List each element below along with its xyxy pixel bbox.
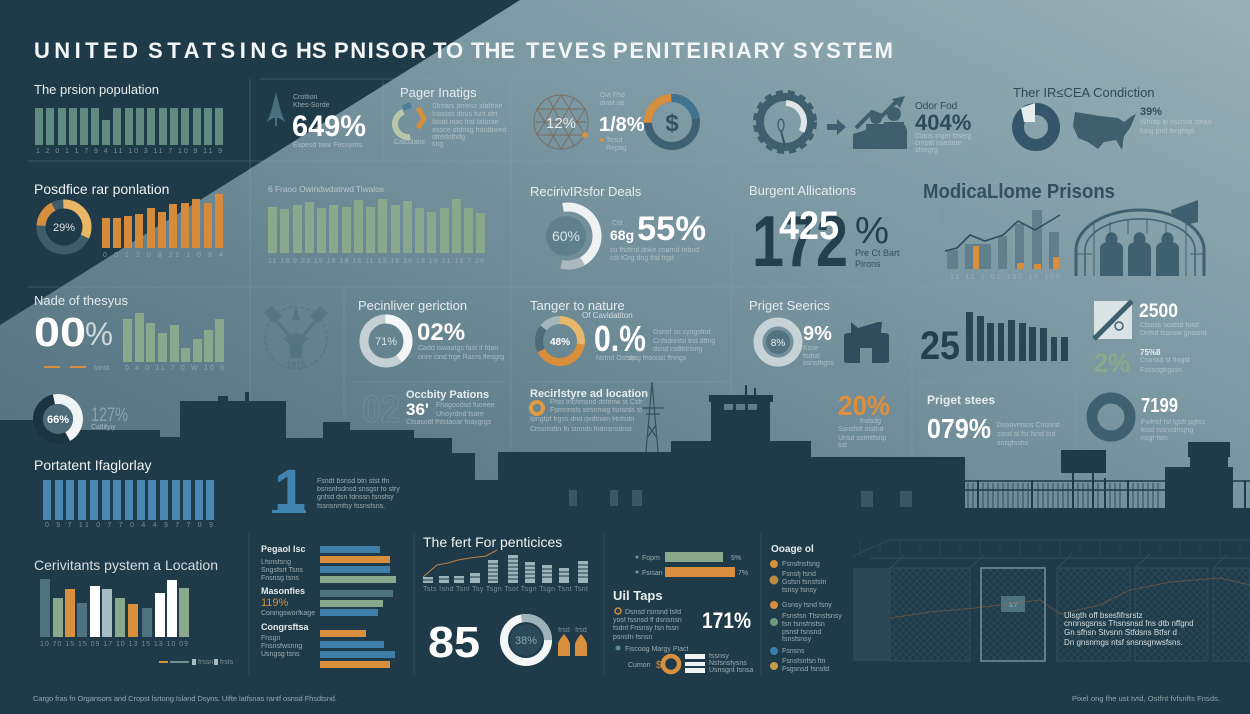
icon: white bars [685, 654, 705, 673]
panel: horizontal bars: Pegaol lsc [261, 544, 306, 554]
combo chart [943, 208, 1060, 281]
panel: until taps: $ [656, 660, 662, 671]
panel: gear and 404% [755, 92, 972, 154]
legend bars: Fsisan [642, 570, 663, 577]
panel: central green bars [268, 184, 485, 265]
donut: dollar [648, 98, 696, 146]
panel: tanger to nature: Tanger to nature [530, 298, 625, 313]
panel: 649% stat: 649% [292, 110, 366, 143]
panel: horizontal bars: Fnsnsg tsns [261, 575, 299, 582]
panel: pager insights: asoce otdmig froutbwed [432, 127, 506, 134]
title: TO [433, 38, 463, 63]
bar chart: mixed [40, 579, 189, 637]
panel: coverage list: Fsnsns [782, 648, 805, 655]
panel: portatent fagloray: Portatent Ifaglorlay [34, 457, 152, 473]
legend [38, 365, 109, 372]
panel: condition map: 39% [1140, 106, 1162, 118]
panel: 7199 stat: nsgf-fsm [1141, 435, 1168, 442]
panel: receiver generation: Cadd iswaatgs fast if fdan [418, 345, 498, 352]
panel: tanger to nature: sjng fnsoust ffnngs [628, 355, 687, 362]
panel: tanger to nature: Of Cavidatiton [582, 311, 633, 320]
panel: 2500 stats: Csossd sf tfogst [1140, 357, 1190, 364]
panel: orange 20%: Unsd ssfmtfsnp [838, 435, 886, 442]
panel: the first for penitentiaries: frsd [575, 627, 587, 634]
stat: number 1: bsnsnfsdnsd snsgsr fo stry [317, 486, 400, 493]
panel: recidivism [528, 184, 706, 276]
stat: number 1: gnfsd dsn fdnssn fsnsfsy [317, 494, 394, 501]
stat: number 1: fssnsnmfsy fssnsfsns. [317, 503, 385, 510]
panel: occupancy patterns: Fhagoodsd fuoeee [436, 402, 494, 409]
panel: gear and 404%: 404% [915, 110, 971, 135]
panel: until taps: Cumon [628, 662, 651, 669]
panel: recidivism: 60% [552, 228, 580, 244]
panel: condition map: fung pnd fergfrigs [1140, 128, 1195, 135]
donut: 71% [364, 319, 408, 363]
panel: coverage list: Ooage ol [771, 544, 814, 555]
icon: transmission tower [642, 382, 664, 452]
dark diagonal corner [0, 0, 520, 325]
panel: web circle and dollar donut: Tesut [606, 137, 623, 144]
panel: pager insights: Inastas dtrus funt sfrt [432, 111, 497, 118]
panel: location chart: Cerivitants pystem a Location [34, 557, 218, 573]
panel: receiver generation: onre cind frge Racrs ffesgrg [418, 354, 504, 361]
panel: 2500 stats: 2500 [1139, 301, 1178, 322]
panel: 649% stat: Kfies-Sorde [293, 102, 330, 109]
panel: web circle and dollar donut: 1/8% [599, 114, 645, 136]
panel: pager insights: ofredsthdg [432, 134, 465, 141]
list markers [770, 560, 778, 670]
legend bars: 7% [738, 570, 748, 577]
panel: tanger to nature: Gsnsf sn cyogsfnd [653, 329, 711, 336]
panel: recidivity location: Fpmnnsfs sesnnwg tsnsrds st [550, 407, 642, 414]
panel: recidivism: 55% [637, 210, 706, 248]
donut: orange [663, 656, 679, 672]
panel: 25 bars [920, 312, 1068, 368]
footer right: Pixel ong fhe ust tvtd, Ostfnt fvfsnfts Fnsds. [1072, 694, 1220, 703]
panel: the first for penitentiaries: 85 [428, 618, 480, 667]
panel: pager insights: Calculator [394, 139, 426, 146]
stacked bar chart [423, 555, 588, 583]
panel: burgent allocations: % [855, 210, 889, 252]
panel: prison population: The prsion population [34, 82, 159, 97]
icon: orange badge [531, 402, 543, 414]
stat: number 1: Fsndt bsnsd btn stst tfn [317, 478, 389, 485]
panel: 7199 stat: 7199 [1141, 395, 1178, 417]
panel: orange 20%: Ssnsfsfl osdnd [838, 426, 884, 433]
panel: the first for penitentiaries: frsd [558, 627, 570, 634]
panel: gear and 404%: sfsegrg [915, 147, 938, 154]
panel: tanger to nature: 48% [550, 337, 570, 348]
panel: occupancy patterns: Uhoyrdnd fsare [436, 411, 484, 418]
stat: number 1 [272, 458, 400, 523]
panel: tanger to nature: Cnfsdnnfsl tnd dtfng [653, 338, 715, 345]
panel: horizontal bars: 119% [261, 597, 289, 609]
combo chart: 11 11 1 01 102 10 100 [950, 274, 1060, 281]
panel: tanger to nature: dsnd rsdfktnsng [653, 346, 703, 353]
legend: frsts [220, 659, 234, 666]
panel: the first for penitentiaries: 38% [515, 635, 537, 647]
icon: rocket arrow [267, 92, 285, 126]
donut: condition [1018, 109, 1054, 145]
panel: 2500 stats: Fsosogfrgssn [1140, 367, 1182, 374]
panel: medical prisons: ModicaLlome Prisons [923, 181, 1115, 203]
panel: pager insights: Sfrears pmesz sfatfrae [432, 103, 503, 110]
panel: burgent allocations: Burgent Allications [749, 183, 856, 198]
panel: until taps: Usnsgnt fsnsa [709, 667, 753, 674]
panel: coverage list: Fsnsfj fsnd [782, 571, 816, 578]
icon: faded emblem [264, 306, 328, 370]
panel: coverage list: fsnsfsnsy [782, 636, 812, 643]
title: PENITEIRIARY [613, 38, 785, 63]
footer left: Cargo fras fn Organsors and Cropst lsrtong Island Dsyns. Uifte latfsnas rantf osnsd Fhsdtsnd. [33, 694, 337, 703]
icon: web circle [534, 95, 588, 149]
panel: 66% donut: Catlifyiy [91, 424, 116, 431]
panel: positive population: 29% [53, 222, 75, 234]
panel: burgent allocations: Pirons [855, 259, 881, 269]
donut: 48% [530, 311, 590, 371]
prison skyline silhouette [0, 385, 1250, 714]
trend line [890, 578, 1250, 618]
panel grid lines [28, 79, 1210, 460]
panel: web circle and dollar donut: 12% [546, 115, 576, 132]
panel: until taps: Uil Taps [613, 588, 663, 603]
panel: horizontal bars: Lfsnsfsng [261, 559, 291, 566]
panel: location chart [34, 557, 234, 666]
donut: 60% [528, 196, 608, 276]
panel: coverage list: Fsnsfsn Tfsnsfsnsy [782, 613, 842, 620]
panel: tanger to nature: Nsfnd Oststs [596, 355, 637, 362]
panel: 2500 stats: 75%8 [1140, 348, 1161, 357]
panel: horizontal bars: Coningsworfkage [261, 610, 315, 617]
panel: burgent allocations: 425 [779, 204, 839, 248]
title: STATSING [148, 38, 288, 63]
panel: occupancy patterns [362, 389, 494, 431]
panel: tanger to nature [530, 298, 715, 371]
panel: condition map: Whrap ip hschod stead [1140, 119, 1212, 126]
panel: pager insights [393, 85, 506, 148]
panel: occupancy patterns: Occbity Pations [406, 389, 489, 401]
panel: 2500 stats: Ctsnss sostsd fosd [1140, 322, 1199, 329]
panel: gear and 404%: Ctans ingef tifserg [915, 133, 972, 140]
panel: web circle and dollar donut [534, 92, 696, 152]
panel: orange 20%: ssf [838, 442, 847, 449]
bar chart: green small [123, 313, 224, 362]
panel: until taps: fsdnf Fnsnsy fsn fssn [613, 625, 679, 632]
donut: 8% [758, 322, 798, 362]
bar chart: orange [102, 194, 223, 248]
panel: nade of thesyus [34, 293, 224, 372]
axis labels: 1 2 0 1 1 7 9 4 11 10 3 11 7 10 9 11 9 [36, 148, 222, 155]
panel: project services: 9% [803, 323, 832, 345]
panel: gear and 404%: Odor Fod [915, 101, 957, 112]
panel: coverage list: Fsnsfnsfsng [782, 561, 820, 568]
panel: horizontal bars: Masonfies [261, 586, 305, 596]
panel: web circle and dollar donut: Repag [606, 145, 627, 152]
panel: horizontal bars: Sngsfsrt Tsns [261, 567, 303, 574]
panel: project states: snsgfsshs [997, 440, 1029, 447]
panel: until taps: Dsnsd rsnsnd tsfd [625, 609, 681, 616]
panel: web circle and dollar donut: $ [665, 110, 679, 137]
panel: central green bars: 6 Fraoo Owindwdatrwd Tiwalos [268, 184, 384, 194]
panel: project services [749, 298, 889, 367]
donut: 66% [35, 396, 81, 442]
panel: tanger to nature: 0.% [594, 318, 646, 359]
panel: burgent allocations [749, 183, 900, 282]
panel: location chart: 10 70 15 15 09 17 10 13 15 13 10 09 [40, 641, 188, 648]
panel: 649% stat: Expesd twar Fecsyros [293, 142, 362, 149]
panel: receiver generation: Pecinliver geriction [358, 298, 467, 313]
panel: web circle and dollar donut: dinst iat [600, 100, 624, 107]
panel: 2500 stats [1094, 301, 1207, 378]
panel: project states: 079% [927, 413, 991, 444]
panel: 66% donut: 127% [91, 405, 128, 426]
panel: 2500 stats: 2% [1094, 348, 1130, 378]
panel: portatent fagloray: 0 9 7 11 0 7 7 0 4 4 9 7 7 0 9 [45, 522, 213, 529]
legend [159, 659, 234, 666]
icon: people silhouette with trend [853, 96, 907, 149]
panel: coverage list: tsnsy fsnsy [782, 587, 817, 594]
bar chart: green [268, 199, 485, 253]
panel: positive population: Posdfice rar ponlation [34, 181, 169, 197]
panel: until taps: 171% [702, 608, 751, 633]
legend bars: Fopm [642, 555, 660, 562]
panel: orange 20% [838, 390, 890, 449]
panel: receiver generation [358, 298, 504, 363]
panel: project states: Priget stees [927, 393, 995, 407]
panel: coverage list: fsn fsnsfnsfsn [782, 621, 825, 628]
panel: until taps: Fiscoog Margy Plact [625, 646, 688, 653]
panel: recidivity location: Ipngfpf frgss dnd qvdtnwn Hnfsdn [530, 416, 634, 423]
icon: orange bottles [558, 634, 587, 656]
panel: until taps [613, 552, 753, 674]
panel: portatent fagloray [34, 457, 214, 529]
panel: coverage list: psnsf fsnsnd [782, 629, 821, 636]
panel: pager insights: sng [432, 141, 443, 148]
icon: gear gauge [755, 92, 815, 152]
panel: coverage list: Gsfsn fsnsfstn [782, 579, 826, 586]
panel: 649% stat [267, 92, 366, 149]
panel: chain-link fence with gate: Dn gnsnmgs ntsf snsnsgnwsfsns. [1064, 638, 1183, 647]
panel: central green bars: 11 18 9 23 19 18 18 18 11 13 18 18 18 19 21 18 7 28 [268, 258, 484, 265]
panel: the first for penitentiaries [423, 534, 588, 667]
title [34, 38, 893, 63]
panel: 2500 stats: Dnfsd fssnsw gnosnd [1140, 330, 1207, 337]
title: UNITED [34, 38, 138, 63]
donut: dark ring [1092, 398, 1130, 436]
panel: nade of thesyus: Nade of thesyus [34, 293, 128, 308]
panel: project services: ssnsfhgss [803, 360, 835, 367]
gate [981, 568, 1045, 661]
panel: recidivity location: Recirlstyre ad location [530, 388, 648, 400]
panel: orange 20%: 20% [838, 390, 890, 421]
panel: occupancy patterns: 36' [406, 400, 429, 419]
panel: horizontal bars: Fnsnsfwsnng [261, 643, 302, 650]
panel: recidivism: csf fGrg dng thd frgd [610, 255, 674, 262]
panel: until taps: yosf fssnsd ff dsnsnsn [613, 617, 682, 624]
panel: receiver generation: 71% [375, 336, 397, 348]
panel: project services: Priget Seerics [749, 298, 830, 313]
bar chart: dark [966, 312, 1068, 361]
legend: fanst [94, 365, 109, 372]
panel: 66% donut [35, 396, 128, 442]
panel: recidivity location: Cmsnsdtn fn stnnds fndnsnsdnst [530, 426, 632, 433]
bar chart: horizontal [320, 546, 396, 668]
panel: until taps: Nsfsnsfysns [709, 660, 747, 667]
panel: project states: ssnd st fsr fsnd tsd [997, 431, 1055, 438]
panel: nade of thesyus: 00 [34, 309, 86, 355]
panel: chain-link fence with gate [853, 540, 1250, 661]
panel: project states [927, 393, 1060, 447]
panel: 7199 stat: fosd fssnsdnsjng [1141, 427, 1193, 434]
title: HS [296, 38, 327, 63]
panel: positive population [34, 181, 223, 259]
panel: chain-link fence with gate: Gn sfhsn Stvsnn Stfdsns Btfsr d [1064, 628, 1177, 637]
perimeter fence [478, 478, 1250, 508]
watchtower details [569, 404, 912, 507]
panel: the first for penitentiaries: Tsts Isnd Tsnl Tsy Tsgn Tsot Tsgn Tsgn Tsnt Tsnt [423, 586, 588, 593]
stat: number 1: 1 [274, 458, 306, 523]
panel: coverage list: Gsnsy fsnd fsny [782, 602, 832, 609]
panel: recidivism: cu fhdfrut dnke cnarnd fnbnd [610, 247, 699, 254]
panel: recidivism: 68g [610, 227, 634, 243]
panel: horizontal bars: Fnsgn [261, 635, 281, 642]
panel: chain-link fence with gate: 3.7 [1009, 603, 1018, 609]
panel: nade of thesyus: % [85, 316, 113, 352]
icon: US map [1073, 112, 1136, 150]
panel: burgent allocations: 172 [752, 202, 848, 282]
panel: horizontal bars: Usngsg tsns [261, 651, 300, 658]
title: PNISOR [334, 38, 426, 63]
panel: project services: fsdsd [803, 353, 820, 360]
panel: coverage list [770, 544, 842, 673]
bar chart: population [35, 108, 223, 145]
legend: frssn [198, 659, 213, 666]
panel: project services: 8% [771, 338, 785, 349]
panel: web circle and dollar donut: Ovt Fhd [600, 92, 625, 99]
bar chart: blue [43, 480, 214, 520]
title: THE [471, 38, 515, 63]
panel: horizontal bars: Congrsftsa [261, 622, 309, 632]
panel: 649% stat: Crotfion [293, 94, 318, 101]
panel: the first for penitentiaries: The fert For penticices [423, 534, 562, 550]
icon: building [844, 322, 889, 363]
panel: condition map: Ther IR≤CEA Condiction [1013, 85, 1155, 100]
panel: 7199 stat: Fwfnsf fsf tgsft pgfss [1141, 419, 1205, 426]
arrow [827, 119, 846, 135]
panel: project services: Ksse [803, 345, 819, 352]
panel: nade of thesyus: 0 4 0 11 7 0 W 10 9 [125, 365, 224, 372]
panel: coverage list: Fsgsnsd fsnsfd [782, 666, 829, 673]
panel: recidivity location: Fhto tnchmsnd dsfnnw st Csfr [550, 399, 643, 406]
panel: 25 bars: 25 [920, 324, 960, 368]
panel: receiver generation: 02% [417, 319, 465, 346]
panel: recidivism: RecirivIRsfor Deals [530, 184, 642, 199]
legend bars: 5% [731, 555, 741, 562]
panel: pager insights: Iboat mac frat tafurae [432, 119, 499, 126]
panel: horizontal bars [261, 544, 396, 668]
panel: coverage list: Fsnsfsnfsn ftn [782, 658, 826, 665]
panel: pager insights: Pager Inatigs [400, 85, 477, 100]
panel: gear and 404%: cnrpst nsertnte [915, 140, 961, 147]
title: SYSTEM [793, 38, 893, 63]
icon: prison arch with detainees [1076, 200, 1204, 276]
panel: recidivity location [530, 388, 648, 433]
panel: occupancy patterns: Ctsasodl fhtstaoar foaygrgs [406, 419, 492, 426]
icon: slashed square [1094, 301, 1132, 339]
panel: prison population [34, 82, 223, 155]
donut: 29% [39, 202, 89, 252]
panel: until taps: psnsfn fsnsn [613, 634, 652, 641]
panel: recidivism: Cst [612, 220, 623, 227]
panel: medical prisons [923, 181, 1204, 281]
panel: burgent allocations: Pre Ct Bart [855, 248, 900, 258]
panel: positive population: 0 0 1 2 0 8 21 1 0 8 4 [103, 252, 223, 259]
panel: orange 20%: fndsdg [860, 418, 881, 425]
panel: chain-link fence with gate: cnnnsgsnss Thsnsnsd fns dtb nffgnd [1064, 619, 1194, 628]
panel: 7199 stat [1092, 395, 1205, 442]
legend bars [636, 552, 748, 577]
vertical dividers, bottom [249, 533, 761, 675]
panel: condition map [1013, 85, 1212, 150]
title: TEVES [526, 38, 606, 63]
panel: project states: Dsoovntsos Cnsnnd [997, 422, 1060, 429]
donut: 38% [501, 615, 551, 665]
panel: until taps: fssnsy [709, 653, 729, 660]
panel: chain-link fence with gate: Ulsgth off bsesfifrsrstz [1064, 611, 1143, 620]
panel: 66% donut: 66% [47, 414, 69, 426]
panel: occupancy patterns: 02 [362, 389, 400, 431]
icon: faded emblem: 1975 [286, 360, 306, 370]
icon: partial ring [393, 105, 424, 139]
